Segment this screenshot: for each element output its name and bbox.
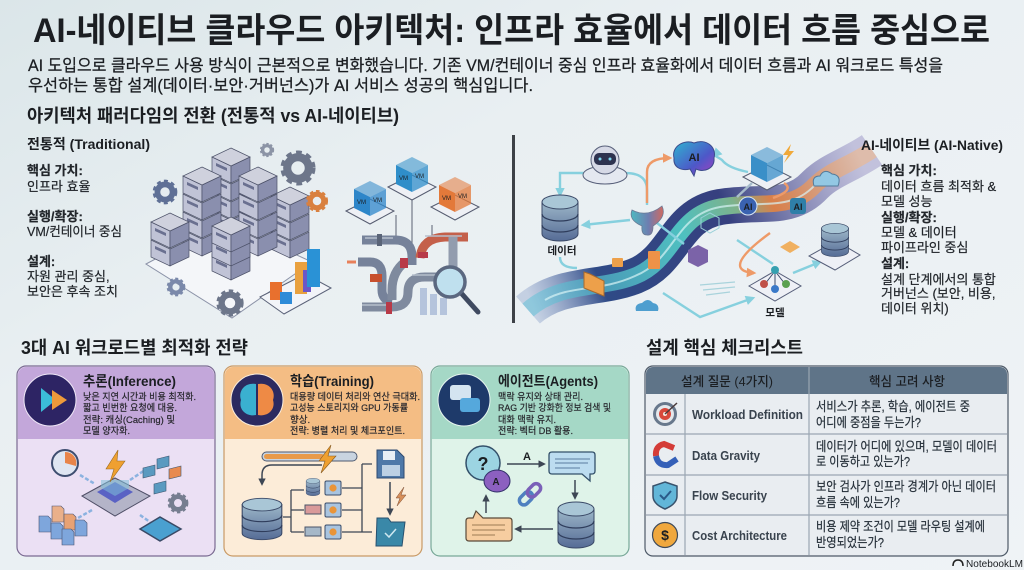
traditional attributes: 실행/확장: xyxy=(27,209,83,224)
icon: folder xyxy=(376,518,405,546)
icon: AI circle xyxy=(739,197,757,215)
inference heading: 추론(Inference) xyxy=(83,373,176,389)
icon: AI tile xyxy=(790,198,806,214)
icon: lower cloud xyxy=(636,300,658,311)
traditional attributes xyxy=(27,163,122,299)
row: flow security xyxy=(653,479,996,510)
agents text: 맥락 유지와 상태 관리. xyxy=(498,391,583,403)
processors xyxy=(325,481,341,539)
panel: traditional text xyxy=(27,136,150,299)
sub-steps xyxy=(305,478,321,536)
inference text: 짧고 빈번한 요청에 대응. xyxy=(83,402,177,414)
agents text: RAG 기반 강화한 정보 검색 및 xyxy=(498,402,611,414)
table header: 설계 질문 (4가지) xyxy=(681,374,773,389)
training text xyxy=(290,391,420,437)
pipes xyxy=(358,237,468,307)
icon: coin xyxy=(652,522,678,548)
row: workload definition: Workload Definition xyxy=(692,407,803,422)
icon: data cube xyxy=(688,245,708,267)
server rack right middle xyxy=(239,167,277,256)
icon: VM cube centre: VM xyxy=(415,174,424,180)
traditional heading: 전통적 (Traditional) xyxy=(27,136,150,152)
inference text xyxy=(83,391,196,437)
icon: text fragment xyxy=(700,282,735,295)
icon: chat xyxy=(612,258,623,267)
divider xyxy=(512,135,515,323)
icon: gear xyxy=(169,494,187,512)
pipe highlights and collars xyxy=(347,234,462,314)
illustration: AI-native data flow xyxy=(528,142,872,319)
icon: agents xyxy=(438,374,490,426)
row: workload definition xyxy=(653,399,970,430)
bars xyxy=(420,288,447,315)
row: cost architecture xyxy=(652,519,985,550)
illustration: agent loop xyxy=(466,446,595,548)
icon: target xyxy=(653,402,677,426)
agents heading: 에이전트(Agents) xyxy=(498,373,598,389)
AI-native attributes: 설계: xyxy=(881,256,909,271)
heading: checklist: 설계 핵심 체크리스트 xyxy=(646,338,803,358)
training heading: 학습(Training) xyxy=(290,373,374,389)
AI-native attributes: 설계 단계에서의 통합 xyxy=(881,272,996,287)
icon: AI chip xyxy=(140,517,181,541)
icon: VM cube left: VM xyxy=(373,198,382,204)
connector lines xyxy=(396,190,432,262)
icon: question bubble: ? xyxy=(478,454,488,474)
icon: storage on platform xyxy=(809,223,860,270)
icon: folder xyxy=(584,272,604,296)
AI-native attributes: 데이터 흐름 최적화 & xyxy=(881,179,997,194)
progress bar xyxy=(262,452,357,461)
bar chart xyxy=(260,249,331,314)
server rack front left xyxy=(151,213,189,266)
icon: router node xyxy=(631,206,663,235)
icon: inference xyxy=(24,374,76,426)
data river xyxy=(528,150,872,310)
icon: VM cube left: VM xyxy=(357,200,366,206)
row: flow security: 흐름 속에 있는가? xyxy=(816,495,900,510)
arrow down xyxy=(389,482,391,514)
icon: answer bubble: A xyxy=(492,477,500,488)
row: cost architecture: 비용 제약 조건이 모델 라우팅 설계에 xyxy=(816,519,985,534)
icon: VM cube centre xyxy=(388,157,436,200)
AI-native attributes: 파이프라인 중심 xyxy=(881,240,968,255)
training text: 대용량 데이터 처리와 연산 극대화. xyxy=(290,391,420,403)
icon: network hex xyxy=(701,213,719,233)
traditional attributes: 자원 관리 중심, xyxy=(27,269,110,284)
label: data: 데이터 xyxy=(548,244,576,257)
inference text: 모델 양자화. xyxy=(83,425,130,437)
watermark: NotebookLM: NotebookLM xyxy=(966,558,1023,570)
traditional attributes: 보안은 후속 조치 xyxy=(27,284,118,299)
panel: AI-native text xyxy=(861,137,1003,316)
inference text: 전략: 캐싱(Caching) 및 xyxy=(83,414,175,426)
traditional attributes: 인프라 효율 xyxy=(27,179,90,194)
icon: note bubble xyxy=(466,511,512,541)
arrow: to note xyxy=(516,528,553,530)
label: model: 모델 xyxy=(765,306,785,319)
icon: shield xyxy=(653,482,677,509)
heading: paradigm shift: 아키텍처 패러다임의 전환 (전통적 vs AI-네이티브) xyxy=(27,106,399,126)
icon: database xyxy=(558,502,594,548)
panel: agents xyxy=(431,366,629,556)
training text: 전략: 병렬 처리 및 체크포인트. xyxy=(290,425,405,437)
river items xyxy=(584,171,839,296)
row: data gravity: Data Gravity xyxy=(692,448,761,463)
icon: coin: $ xyxy=(661,527,669,543)
icon: VM cube right xyxy=(431,177,479,220)
row: data gravity: 데이터가 어디에 있으며, 모델이 데이터 xyxy=(816,439,997,454)
icon: VM cube centre: VM xyxy=(399,176,408,182)
row: workload definition: 서비스가 추론, 학습, 에이전트 중 xyxy=(816,399,970,414)
agents text: 대화 맥락 유지. xyxy=(498,414,556,426)
row: data gravity xyxy=(656,439,997,469)
AI-native attributes: 모델 성능 xyxy=(881,194,932,209)
table: checklist xyxy=(645,366,1008,556)
icon: cube on platform xyxy=(743,147,791,190)
server rack front centre xyxy=(212,217,250,280)
AI-native attributes: 거버넌스 (보안, 비용, xyxy=(881,286,995,301)
icon: AI tile: AI xyxy=(794,202,802,212)
icon: model graph xyxy=(749,266,801,301)
AI-native attributes xyxy=(881,163,997,316)
row: data gravity: 로 이동하고 있는가? xyxy=(816,454,910,469)
icon: chip xyxy=(82,478,150,516)
panel: inference xyxy=(17,366,215,556)
icon: magnifier xyxy=(435,267,478,312)
AI-native attributes: 데이터 위치) xyxy=(881,301,949,316)
title: AI-네이티브 클라우드 아키텍처: 인프라 효율에서 데이터 흐름 중심으로 xyxy=(33,12,990,50)
icon: document xyxy=(648,251,660,269)
icon: AI circle: AI xyxy=(744,202,752,212)
row: cost architecture: 반영되었는가? xyxy=(816,535,884,550)
agents text: 전략: 벡터 DB 활용. xyxy=(498,425,573,437)
icon: reply bubble xyxy=(549,452,595,481)
illustration: VMs and pipes xyxy=(346,157,479,315)
agents text xyxy=(498,391,611,437)
icon: lightning xyxy=(783,144,794,163)
row: flow security: 보안 검사가 인프라 경계가 아닌 데이터 xyxy=(816,479,996,494)
illustration: server racks xyxy=(146,144,331,318)
training text: 향상. xyxy=(290,414,310,426)
training text: 고성능 스토리지와 GPU 가동률 xyxy=(290,402,408,414)
icon: VM cube right: VM xyxy=(458,194,467,200)
row: cost architecture: Cost Architecture xyxy=(692,528,787,543)
traditional attributes: 설계: xyxy=(27,254,55,269)
intro text: AI 도입으로 클라우드 사용 방식이 근본적으로 변화했습니다. 기존 VM/컨테이너 중심 인프라 효율화에서 데이터 흐름과 AI 워크로드 특성을 xyxy=(28,56,943,75)
icon: clock xyxy=(52,450,78,476)
icon: magnet xyxy=(656,444,677,465)
icon: AI brain: AI xyxy=(688,152,700,164)
illustration: inference chip xyxy=(39,450,187,545)
row: flow security: Flow Security xyxy=(692,488,768,503)
intro text xyxy=(28,56,943,95)
server rack back xyxy=(212,148,250,237)
AI-native attributes: 모델 & 데이터 xyxy=(881,225,957,240)
server rack left middle xyxy=(183,167,221,256)
illustration: training pipeline xyxy=(242,445,406,546)
icon: data cylinder xyxy=(542,195,578,241)
AI-native attributes: 핵심 가치: xyxy=(881,163,937,178)
icon: VM cube right: VM xyxy=(442,196,451,202)
icon: small diamond xyxy=(780,241,800,253)
traditional attributes: VM/컨테이너 중심 xyxy=(27,224,122,239)
table header: 핵심 고려 사항 xyxy=(869,374,945,389)
icon: lightning xyxy=(106,450,125,482)
icon: database xyxy=(242,498,282,540)
panel: training xyxy=(224,366,422,556)
arrow: up xyxy=(485,496,487,513)
icon: envelopes xyxy=(143,456,181,494)
server rack far right xyxy=(271,187,309,258)
icon: gears xyxy=(155,144,326,315)
icon: small lightning xyxy=(396,487,406,506)
AI-native heading: AI-네이티브 (AI-Native) xyxy=(861,137,1003,153)
arrow: to reply: A xyxy=(523,451,531,463)
intro text: 우선하는 통합 설계(데이터·보안·거버넌스)가 AI 서비스 성공의 핵심입니다. xyxy=(28,76,533,95)
icon: chain link xyxy=(518,482,542,507)
icon: VM cube left xyxy=(346,181,394,224)
traditional attributes: 핵심 가치: xyxy=(27,163,83,178)
row: workload definition: 어디에 중점을 두는가? xyxy=(816,415,921,430)
arrow: to database xyxy=(574,480,576,498)
flow arrows xyxy=(560,156,820,317)
AI-native attributes: 실행/확장: xyxy=(881,210,937,225)
icon: robot xyxy=(583,146,627,184)
grid lines xyxy=(646,367,1007,555)
heading: workloads: 3대 AI 워크로드별 최적화 전략 xyxy=(21,338,248,358)
icon: cloud xyxy=(813,171,839,186)
icon: training brain xyxy=(231,374,283,426)
table header xyxy=(646,367,1007,394)
icon: lightning xyxy=(319,445,336,473)
icon: documents xyxy=(39,506,87,545)
icon: floppy xyxy=(377,450,404,478)
icon: AI brain xyxy=(674,142,714,176)
inference text: 낮은 지연 시간과 비용 최적화. xyxy=(83,391,196,403)
